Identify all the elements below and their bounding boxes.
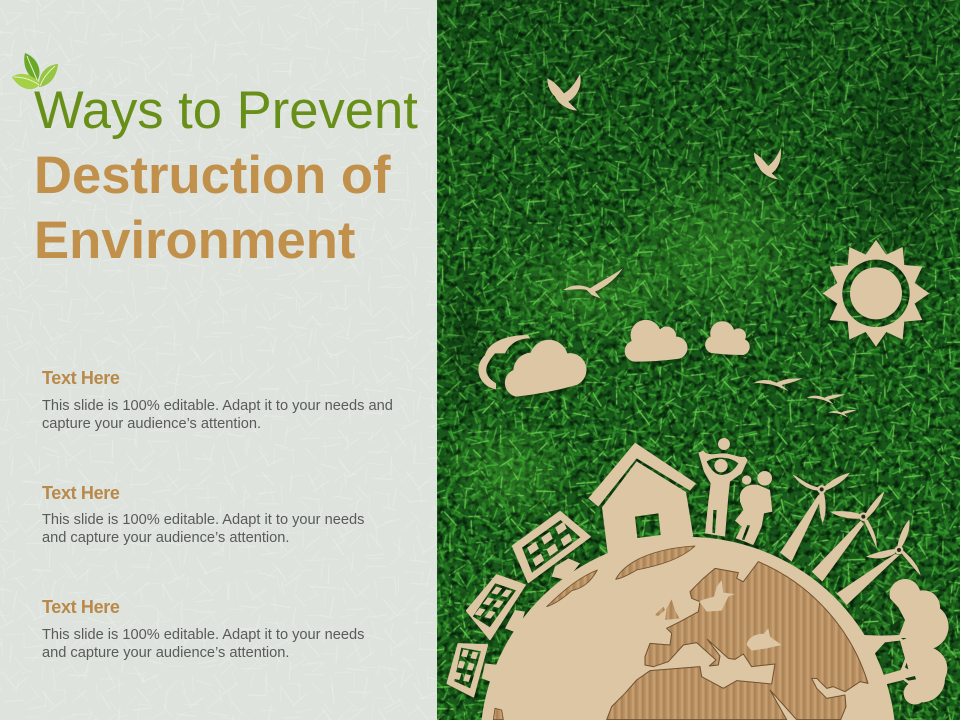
icon: adult carrying child [698,438,748,537]
body text 2 [42,512,364,546]
icon: green leaves [12,53,58,90]
text block 2 [42,483,364,546]
globe base [481,537,894,720]
text block 3 [42,597,364,661]
icon: house [588,443,696,553]
icon: bird top right [754,148,781,179]
body text 3: This slide is 100% editable. Adapt it to your needs [42,627,364,643]
subheading 1: Text Here [42,368,120,388]
icon: small cloud [705,321,750,355]
icon: bird top left [547,74,581,111]
heading line: Environment: Environment [34,211,355,270]
text block 1 [42,368,393,432]
subheading 2: Text Here [42,483,120,503]
icon: middle cloud [625,320,688,362]
subheading 3: Text Here [42,597,120,617]
globe map: Europe, Africa and Asia cut-out [607,562,868,720]
globe map: Greenland and Iceland cut-outs [493,546,695,720]
title [34,81,418,270]
body text 1: capture your audience’s attention. [42,416,261,432]
body text 1 [42,398,393,432]
body text 3 [42,627,364,661]
body text 3: and capture your audience’s attention. [42,645,289,661]
icon: wind turbines [780,473,921,605]
icon: solar panels [447,512,590,697]
heading line: Destruction of: Destruction of [34,146,390,205]
body text 2: and capture your audience’s attention. [42,530,289,546]
icon: large cloud with crescent [478,335,586,397]
globe map: Britain and Ireland [655,599,679,620]
icon: gliding bird [563,268,623,298]
heading line: Ways to Prevent: Ways to Prevent [34,81,418,140]
globe map: Black Sea [747,628,782,651]
body text 2: This slide is 100% editable. Adapt it to your needs [42,512,364,528]
globe map: Baltic Sea [699,580,735,612]
icon: tree [863,579,949,704]
icon: sun [823,240,929,347]
icon: flock of birds [754,378,857,417]
icon: parent holding child [735,471,772,545]
body text 1: This slide is 100% editable. Adapt it to your needs and [42,398,393,414]
